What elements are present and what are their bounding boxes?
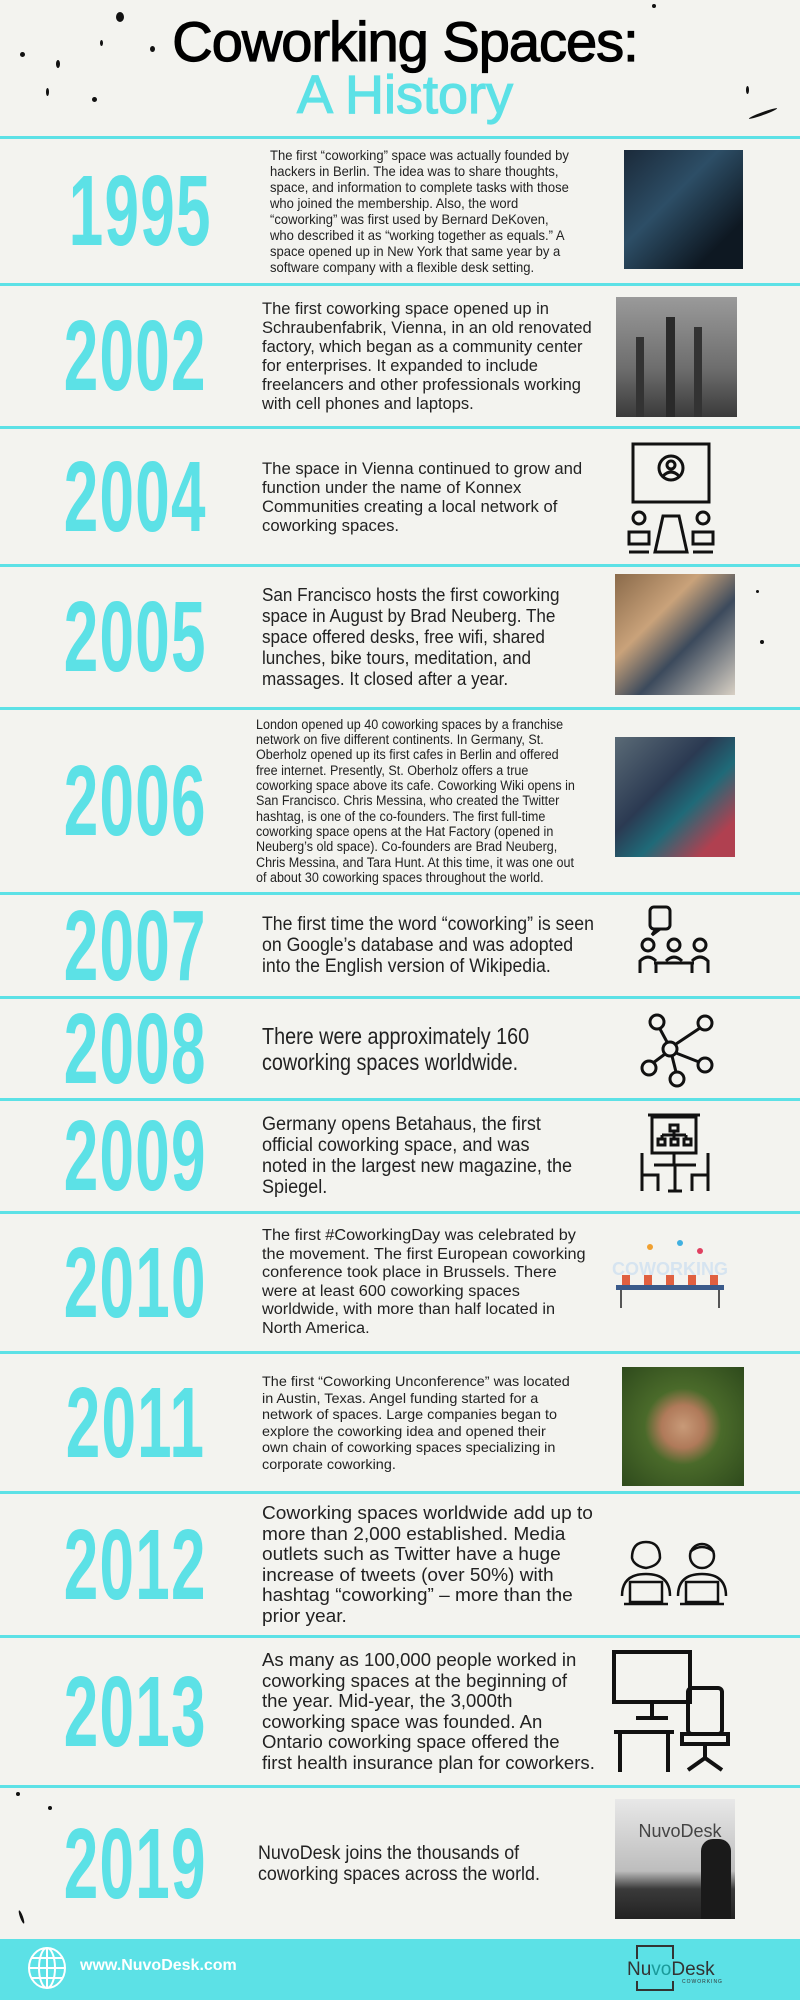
- text 2002: for enterprises. It expanded to include: [262, 356, 538, 375]
- text 2010: the movement. The first European coworking: [262, 1246, 586, 1262]
- photo: NuvoDesk reception: NuvoDesk: [638, 1821, 722, 1841]
- icon: board and table: [640, 1114, 710, 1192]
- image: coworking illustration: [612, 1240, 728, 1308]
- icon: network: [640, 1014, 714, 1088]
- text 2004: The space in Vienna continued to grow and: [262, 458, 582, 478]
- text 2006: network on five different continents. In Germany, St.: [256, 732, 544, 747]
- year 1995: 1995: [69, 155, 211, 267]
- text 2008: There were approximately 160: [262, 1022, 529, 1048]
- text 2011: The first “Coworking Unconference” was located: [262, 1373, 570, 1389]
- text 2011: explore the coworking idea and opened their: [262, 1422, 546, 1438]
- text 2007: [262, 914, 594, 977]
- text 2013: the year. Mid-year, the 3,000th: [262, 1691, 512, 1711]
- photo: NuvoDesk reception: [615, 1799, 735, 1919]
- photo: people with laptops: [615, 574, 735, 695]
- text 2010: conference took place in Brussels. There: [262, 1264, 557, 1281]
- text 2006: Neuberg’s old space). Co-founders are Brad Neuberg,: [256, 839, 557, 854]
- text 2011: network of spaces. Large companies began to: [262, 1406, 557, 1422]
- text 2002: Schraubenfabrik, Vienna, in an old renovated: [262, 318, 592, 337]
- text 2004: coworking spaces.: [262, 516, 399, 534]
- text 2006: coworking space opens at the Hat Factory (opened in: [256, 824, 553, 839]
- text 2002: with cell phones and laptops.: [262, 394, 474, 413]
- year 2002: 2002: [64, 300, 206, 412]
- text 1995: software company with a flexible desk setting.: [270, 259, 534, 275]
- text 2012: Coworking spaces worldwide add up to: [262, 1503, 593, 1523]
- text 2012: more than 2,000 established. Media: [262, 1524, 565, 1544]
- text 2013: [262, 1638, 602, 1785]
- text 2012: prior year.: [262, 1606, 347, 1626]
- text 2013: Ontario coworking space offered the: [262, 1732, 560, 1752]
- text 2011: own chain of coworking spaces specializing in: [262, 1439, 555, 1455]
- text 2013: As many as 100,000 people worked in: [262, 1650, 576, 1670]
- photo: factory chimneys: [616, 297, 737, 417]
- text 2006: of about 30 coworking spaces throughout the world.: [256, 870, 544, 885]
- logo: NuvoDesk: [626, 1945, 732, 1993]
- icon: presentation meeting: [628, 442, 714, 554]
- title: [172, 10, 638, 125]
- text 2012: outlets such as Twitter have a huge: [262, 1544, 561, 1564]
- title: A History: [297, 65, 513, 125]
- text 1995: who joined the membership. Also, the word: [270, 195, 518, 211]
- year 2008: 2008: [64, 992, 206, 1104]
- text 2013: first health insurance plan for coworkers.: [262, 1752, 595, 1772]
- text 2007: on Google’s database and was adopted: [262, 935, 573, 956]
- text 2006: free internet. Presently, St. Oberholz offers a true: [256, 763, 528, 778]
- text 2004: function under the name of Konnex: [262, 478, 521, 496]
- text 2010: were at least 600 coworking spaces: [262, 1282, 520, 1300]
- text 2002: freelancers and other professionals working: [262, 375, 581, 394]
- text 2009: Germany opens Betahaus, the first: [262, 1114, 541, 1135]
- year 2019: 2019: [64, 1808, 206, 1920]
- text 2002: [262, 299, 592, 413]
- text 2007: into the English version of Wikipedia.: [262, 956, 551, 977]
- year 2005: 2005: [64, 581, 206, 693]
- text 2019: [258, 1788, 598, 1939]
- year 2006: 2006: [64, 745, 206, 857]
- text 2006: San Francisco. Chris Messina, who created the Twitter: [256, 793, 559, 808]
- text 2006: [256, 717, 575, 885]
- text 2006: hashtag, is one of the co-founders. The first full-time: [256, 809, 545, 824]
- panel: 2007: [64, 890, 710, 1002]
- year 2013: 2013: [64, 1656, 206, 1768]
- text 2010: [262, 1227, 586, 1336]
- photo: joined hands: [622, 1367, 744, 1486]
- icon: two people with laptops: [612, 1536, 736, 1608]
- text 2002: The first coworking space opened up in: [262, 299, 549, 318]
- year 2007: 2007: [64, 890, 206, 1002]
- text 2011: corporate coworking.: [262, 1456, 396, 1472]
- text 1995: The first “coworking” space was actually founded by: [270, 147, 569, 163]
- icon: desk and chair: [610, 1648, 736, 1774]
- panel: 2002: [64, 297, 737, 417]
- text 2013: coworking spaces at the beginning of: [262, 1670, 567, 1690]
- icon: group discussion: [638, 906, 710, 973]
- text 2012: hashtag “coworking” – more than the: [262, 1585, 573, 1605]
- text 2006: Chris Messina, and Tara Hunt. At this time, it was one out: [256, 855, 574, 870]
- year 2009: 2009: [64, 1100, 206, 1212]
- text 2012: increase of tweets (over 50%) with: [262, 1564, 554, 1584]
- text 2009: official coworking space, and was: [262, 1135, 530, 1156]
- text 2019: NuvoDesk joins the thousands of: [258, 1842, 519, 1864]
- panel: 2008: [64, 992, 714, 1104]
- logo: NuvoDesk: NuvoDesk: [627, 1959, 715, 1980]
- panel: 2004: [64, 440, 714, 554]
- text 2012: [262, 1503, 593, 1626]
- text 2011: in Austin, Texas. Angel funding started for a: [262, 1390, 538, 1406]
- text 2007: The first time the word “coworking” is seen: [262, 914, 594, 935]
- panel: 2019: [0, 1788, 800, 1939]
- text 1995: who described it as “working together as equals.” A: [270, 227, 565, 243]
- text 1995: “coworking” was first used by Bernard DeKoven,: [270, 211, 549, 227]
- text 2004: Communities creating a local network of: [262, 496, 557, 516]
- text 2019: coworking spaces across the world.: [258, 1864, 540, 1884]
- year 2004: 2004: [64, 440, 206, 552]
- text 2010: worldwide, with more than half located in: [262, 1301, 555, 1318]
- text 2006: London opened up 40 coworking spaces by a franchise: [256, 717, 563, 732]
- text 2013: coworking space was founded. An: [262, 1712, 542, 1732]
- year 2011: 2011: [65, 1366, 205, 1478]
- text 2005: [262, 584, 559, 689]
- text 2005: lunches, bike tours, meditation, and: [262, 648, 531, 668]
- text 2006: coworking space above its cafe. Coworking Wiki opens in: [256, 778, 575, 793]
- text 1995: [270, 147, 569, 275]
- logo: NuvoDesk: COWORKING: [682, 1979, 723, 1985]
- text 2009: [262, 1114, 572, 1198]
- text 1995: space opened up in New York that same year by a: [270, 243, 560, 259]
- text 2010: North America.: [262, 1320, 370, 1336]
- text 1995: space, and information to complete tasks with those: [270, 179, 569, 195]
- text 2005: space in August by Brad Neuberg. The: [262, 606, 555, 626]
- title: Coworking Spaces:: [172, 10, 638, 73]
- panel: 2009: [64, 1100, 710, 1212]
- year 2010: 2010: [64, 1226, 206, 1338]
- panel: 2012: [64, 1503, 728, 1626]
- icon: globe: [27, 1946, 67, 1990]
- image: coworking illustration: COWORKING: [612, 1259, 728, 1279]
- footer: [0, 1939, 800, 2000]
- panel: 2011: [65, 1366, 744, 1486]
- text 2006: Oberholz opened up its first cafes in Berlin and offered: [256, 747, 559, 762]
- text 2009: Spiegel.: [262, 1177, 327, 1198]
- text 2004: [262, 458, 582, 534]
- text 2010: The first #CoworkingDay was celebrated by: [262, 1227, 576, 1244]
- text 2011: [262, 1373, 570, 1472]
- website url: www.NuvoDesk.com: [80, 1957, 237, 1974]
- text 2009: noted in the largest new magazine, the: [262, 1156, 572, 1177]
- panel: 2010: [64, 1226, 728, 1338]
- text 2005: space offered desks, free wifi, shared: [262, 626, 545, 646]
- panel: 2006: [64, 717, 735, 885]
- text 2008: coworking spaces worldwide.: [262, 1048, 518, 1074]
- year 2012: 2012: [64, 1508, 206, 1620]
- panel: 2005: [64, 574, 735, 695]
- text 1995: hackers in Berlin. The idea was to share thoughts,: [270, 163, 559, 179]
- photo: hackers: [624, 150, 743, 269]
- text 2005: San Francisco hosts the first coworking: [262, 584, 559, 604]
- photo: team at table: [615, 737, 735, 857]
- text 2005: massages. It closed after a year.: [262, 668, 508, 688]
- text 2002: factory, which began as a community center: [262, 337, 582, 356]
- panel: 2013: [0, 1638, 800, 1785]
- panel: 1995: [69, 147, 743, 275]
- text 2008: [262, 1022, 529, 1075]
